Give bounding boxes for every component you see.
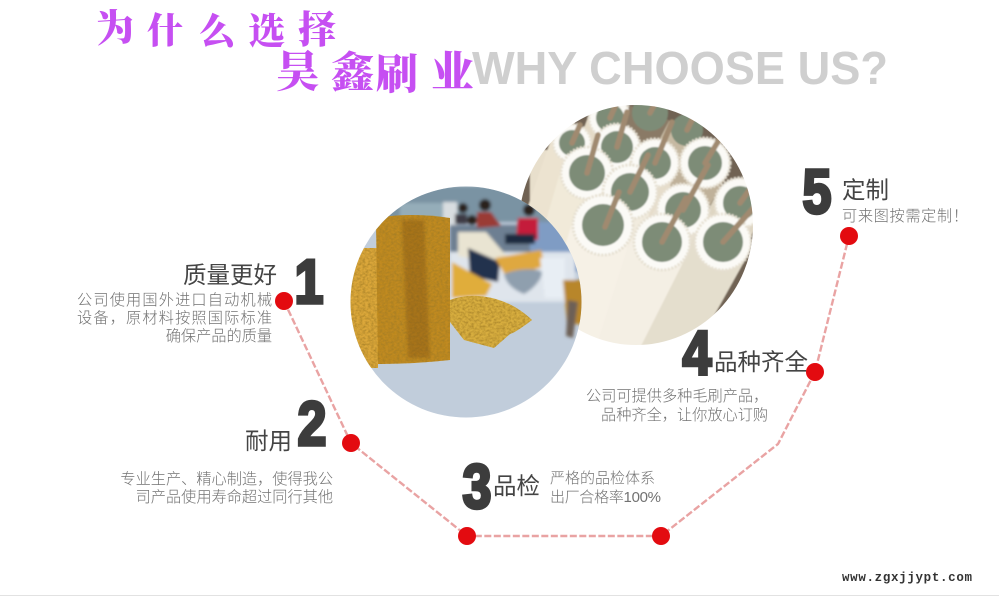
marker 1: [275, 292, 293, 310]
description 4: 品种齐全，让你放心订购: [601, 407, 768, 424]
front rollers: [640, 246, 746, 345]
number 4: 4: [683, 319, 712, 388]
heading 1: 质量更好: [183, 262, 277, 288]
number 3: 3: [463, 453, 491, 522]
title: why choose Haoxin Brush: 业: [431, 39, 474, 100]
title: why choose Haoxin Brush: 择: [298, 0, 336, 54]
item 1: quality: [77, 248, 323, 345]
heading 3: 品检: [493, 473, 540, 499]
marker 5: [840, 227, 858, 245]
website url: www.zgxjjypt.com: [842, 571, 972, 585]
description 3: 出厂合格率100%: [550, 489, 661, 506]
heading 2: 耐用: [245, 428, 292, 454]
marker 2: [342, 434, 360, 452]
title: why choose Haoxin Brush: 什: [147, 3, 183, 54]
description 4: [586, 388, 768, 424]
description 2: 专业生产、精心制造，使得我公: [120, 471, 333, 488]
description 2: 司产品使用寿命超过同行其他: [136, 489, 333, 506]
item 2: durable: [120, 390, 360, 506]
title: why choose Haoxin Brush: 选: [248, 1, 285, 55]
number 2: 2: [298, 390, 326, 459]
description 1: 确保产品的质量: [166, 328, 272, 345]
title: why choose Haoxin Brush: 刷: [376, 42, 418, 102]
photo: factory workers with yellow brushes: [350, 186, 585, 420]
description 3: 严格的品检体系: [550, 470, 655, 487]
heading 5: 定制: [842, 177, 889, 203]
marker 3: [458, 527, 476, 545]
description 4: 公司可提供多种毛刷产品，: [586, 388, 768, 405]
back rollers: [584, 115, 596, 147]
marker 4: [806, 363, 824, 381]
description 2: [120, 471, 333, 506]
description 1: 公司使用国外进口自动机械: [77, 292, 272, 309]
item 5: custom: [803, 158, 968, 245]
heading 4: 品种齐全: [714, 349, 808, 375]
number 5: 5: [803, 158, 831, 227]
description 3: [550, 470, 661, 506]
connector: dashed timeline: [284, 236, 849, 536]
item 4: variety: [586, 319, 824, 424]
marker: end of inspection segment: [652, 527, 670, 545]
description 1: [77, 292, 272, 345]
item 3: inspection: [458, 453, 661, 545]
number 1: 1: [295, 248, 323, 317]
title: why choose Haoxin Brush: 昊: [276, 39, 319, 100]
title: why choose Haoxin Brush: 鑫: [331, 40, 374, 101]
description 5: 可来图按需定制！: [842, 208, 968, 225]
title: why choose Haoxin Brush: [94, 0, 474, 102]
heading: WHY CHOOSE US?: WHY CHOOSE US?: [472, 42, 888, 94]
photo: white roller brushes: [522, 105, 753, 345]
title: why choose Haoxin Brush: 么: [199, 4, 238, 55]
description 1: 设备，原材料按照国际标准: [77, 310, 272, 327]
